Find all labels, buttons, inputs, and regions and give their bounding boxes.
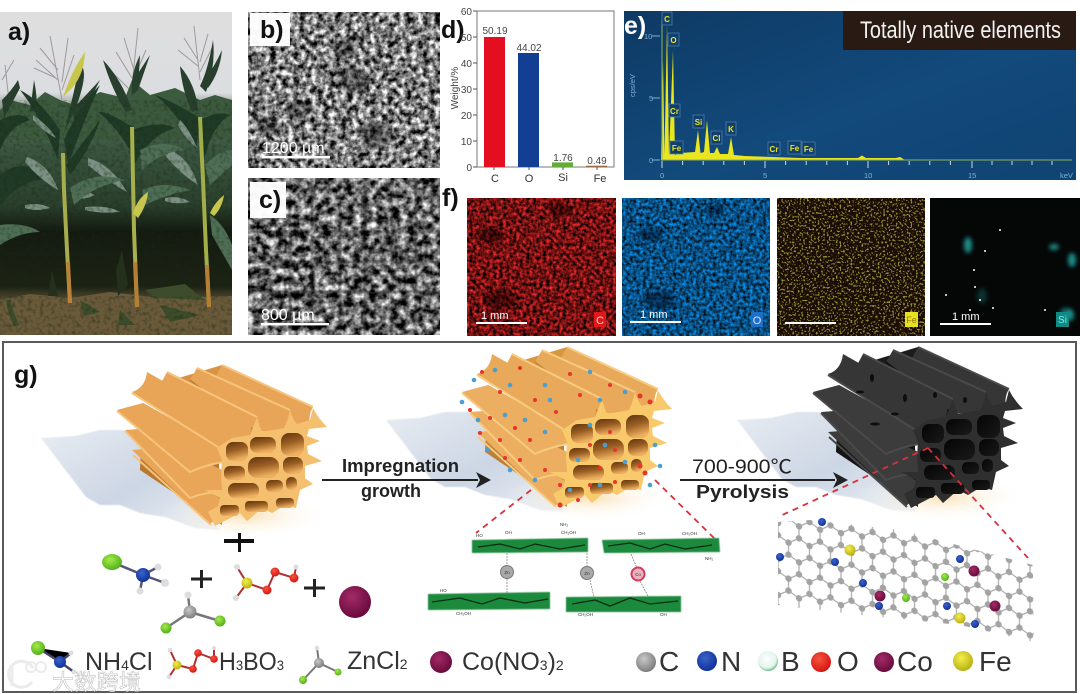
spectrum peaks	[661, 24, 905, 160]
element tag Fe: Fe	[906, 315, 917, 325]
bar values: 0.49	[587, 156, 607, 167]
legend: C: C	[659, 646, 679, 677]
plus 3	[304, 579, 325, 597]
bar values: 44.02	[516, 43, 542, 54]
scale bar 1200 um: 1200 µm	[262, 140, 325, 157]
block: carbonized stalk	[737, 347, 1026, 521]
element tag Si	[1056, 312, 1069, 327]
legend: B: B	[781, 646, 800, 677]
axis labels: 10	[644, 32, 652, 41]
element tag Fe	[905, 312, 918, 327]
scale bar 800 um: 800 µm	[261, 307, 315, 324]
legend: C	[636, 646, 679, 677]
axis labels: keV	[1060, 171, 1073, 180]
axis labels: 15	[968, 171, 976, 180]
legend: Co: Co	[897, 646, 933, 677]
peak labels	[662, 12, 815, 155]
bars	[484, 37, 607, 167]
legend: ZnCl2: ZnCl2	[347, 647, 408, 675]
red dashed zoom lines	[476, 448, 1028, 558]
upper leaves silhouette	[0, 80, 232, 140]
element tag C	[594, 312, 606, 327]
panel d: weight percent bar chart: 60	[461, 7, 472, 18]
label a: a)	[8, 18, 30, 46]
bar values: 50.19	[482, 26, 508, 37]
peak labels: Fe	[672, 144, 682, 153]
scale bar: 1 mm	[952, 311, 980, 323]
label c: c)	[259, 186, 281, 214]
category labels: C	[491, 173, 499, 185]
panel d: weight percent bar chart: 40	[461, 59, 472, 70]
panel d: weight percent bar chart: Weight/%	[450, 67, 461, 109]
panel d: weight percent bar chart: 50	[461, 33, 472, 44]
panel f: Si map	[930, 198, 1080, 336]
panel e: EDS spectrum	[624, 11, 1076, 180]
big plus	[224, 533, 254, 552]
peak labels: O	[670, 36, 677, 45]
plus 2	[191, 570, 212, 588]
scale bar	[940, 311, 991, 325]
watermark logo and name	[9, 661, 141, 694]
scale bar	[630, 309, 681, 323]
legend: N	[697, 646, 741, 677]
element tag Si: Si	[1058, 315, 1067, 326]
cellulose chains with metal ions: HO	[476, 533, 483, 538]
dots: red	[468, 366, 652, 508]
legend: Co	[874, 646, 933, 677]
cellulose chains with metal ions: NH₂	[705, 556, 713, 561]
molecule: NH4Cl	[102, 554, 169, 594]
yellow leaves	[63, 52, 224, 218]
legend: NH4Cl	[31, 641, 153, 676]
block: impregnated stalk with dots	[386, 347, 675, 521]
cellulose chains with metal ions: CH₂OH	[561, 530, 576, 535]
element tag O	[751, 312, 763, 327]
cobalt ion ball	[339, 586, 371, 618]
legend: Co(NO3)2: Co(NO3)2	[462, 648, 564, 676]
label e: e)	[624, 12, 646, 40]
cellulose chains with metal ions: OH	[638, 531, 645, 536]
panel d: weight percent bar chart: 20	[461, 111, 472, 122]
legend: O: O	[837, 646, 859, 677]
text: impregnation growth	[342, 456, 459, 501]
category labels	[491, 172, 606, 185]
text: 700-900C pyrolysis: 700-900℃	[692, 457, 792, 478]
scale bar: 1 mm	[640, 309, 668, 321]
bar values: 1.76	[553, 153, 573, 164]
tassels	[2, 26, 212, 110]
label c	[250, 182, 286, 218]
molecule: ZnCl2	[160, 592, 226, 634]
cellulose chains with metal ions: OH	[660, 612, 667, 617]
stalks	[63, 117, 209, 307]
panel d: weight percent bar chart	[441, 7, 614, 185]
panel b: SEM image	[248, 12, 440, 168]
cellulose chains with metal ions: HO	[440, 588, 447, 593]
scale bar	[785, 322, 836, 324]
axis labels: 5	[763, 171, 767, 180]
arrow: pyrolysis	[680, 472, 848, 488]
axis labels: 10	[864, 171, 872, 180]
dopant atoms	[776, 518, 1000, 628]
text: 700-900C pyrolysis: Pyrolysis	[696, 482, 789, 502]
cellulose chains with metal ions: Zn	[504, 570, 510, 575]
scale bar: 1 mm	[481, 310, 508, 322]
peak labels: Cl	[712, 134, 720, 143]
cellulose chains with metal ions: NH₂	[560, 522, 568, 527]
panel f: C map	[467, 198, 616, 336]
legend: B	[758, 646, 800, 677]
cellulose chains with metal ions: CH₂OH	[456, 611, 471, 616]
axis labels: 0	[660, 171, 664, 180]
peak labels: K	[728, 125, 734, 134]
panel d: weight percent bar chart: 30	[461, 85, 472, 96]
panel d: weight percent bar chart: 0	[466, 163, 472, 174]
pits on carbon fins	[856, 374, 967, 426]
foliage leaves	[0, 85, 230, 205]
panel f: Fe map	[777, 198, 925, 336]
label d: d)	[441, 16, 465, 44]
panel g: synthesis scheme	[3, 342, 1076, 692]
legend: H3BO3	[167, 646, 284, 679]
cellulose chains with metal ions: CH₂OH	[682, 531, 697, 536]
label f: f)	[442, 184, 459, 212]
arrow: impregnation	[322, 472, 491, 488]
cellulose chains with metal ions: Zn	[584, 571, 590, 576]
peak labels: Cr	[770, 145, 778, 154]
element tag C: C	[596, 315, 604, 327]
cellulose chains with metal ions	[428, 522, 720, 617]
category labels: Fe	[594, 173, 606, 185]
category labels: Si	[558, 172, 568, 184]
ground	[0, 292, 232, 335]
panel f: O map	[622, 198, 770, 336]
panel c: SEM image	[248, 178, 440, 335]
legend: Fe: Fe	[979, 646, 1012, 677]
peak labels: C	[664, 15, 670, 24]
peak labels: Fe	[804, 145, 814, 154]
block: raw corn stalk	[41, 365, 330, 539]
legend: Fe	[953, 646, 1012, 677]
label b: b)	[260, 16, 284, 44]
axis labels	[628, 32, 1073, 180]
legend: NH4Cl: NH4Cl	[85, 648, 153, 676]
label g: g)	[14, 361, 38, 389]
legend: N: N	[721, 646, 741, 677]
axis labels: 0	[649, 156, 653, 165]
label b	[250, 13, 290, 46]
bar values	[482, 26, 607, 167]
cellulose chains with metal ions: Co	[635, 572, 641, 577]
header box	[843, 11, 1076, 50]
panel d: weight percent bar chart: 10	[461, 137, 472, 148]
cellulose chains with metal ions: OH	[505, 530, 512, 535]
cellulose chains with metal ions: CH₂OH	[578, 612, 593, 617]
scale bar	[476, 310, 527, 324]
molecule: H3BO3	[233, 564, 298, 601]
text: impregnation growth: Impregnation	[342, 456, 459, 476]
dots: blue	[460, 368, 662, 492]
text: impregnation growth: growth	[361, 481, 421, 501]
axis labels: cps/eV	[628, 74, 637, 97]
element tag O: O	[753, 315, 762, 327]
graphene sheet with dopants	[776, 518, 1034, 642]
category labels: O	[525, 173, 534, 185]
panel a: corn plants photo	[0, 12, 232, 335]
legend: O	[811, 646, 859, 677]
peak labels: Cr	[670, 107, 679, 116]
peak labels: Si	[695, 118, 702, 127]
peak labels: Fe	[790, 144, 800, 153]
text: 700-900C pyrolysis	[692, 457, 792, 502]
legend: H3BO3: H3BO3	[219, 648, 284, 676]
axis labels: 5	[649, 94, 653, 103]
legend: ZnCl2	[299, 646, 408, 684]
